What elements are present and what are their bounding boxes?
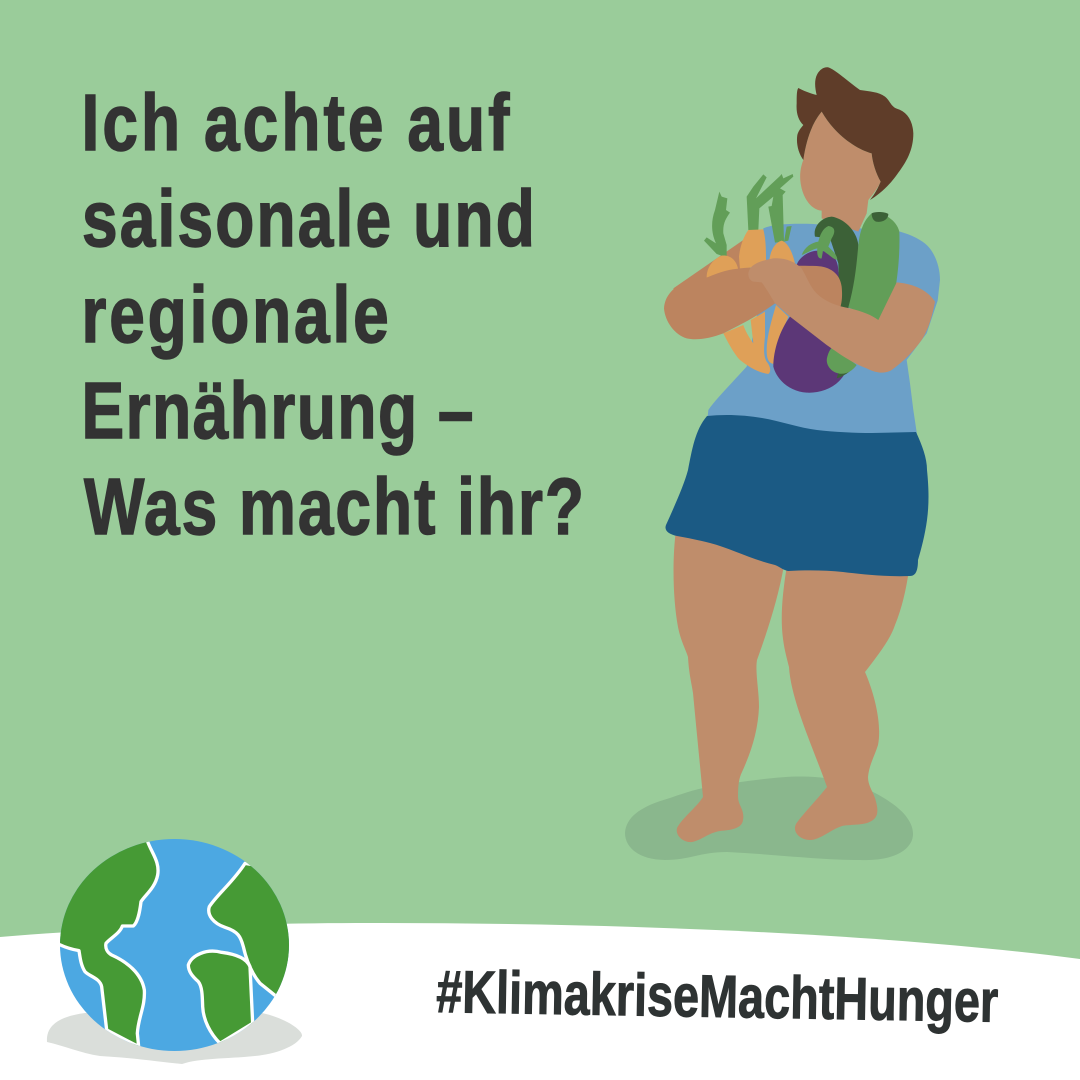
carrot tops [704,174,793,257]
upper body group [664,67,940,443]
title [82,78,584,552]
light zucchini [827,213,899,374]
ocean [60,839,289,1051]
hair [797,67,913,200]
eggplant [773,251,853,393]
shorts [665,415,928,576]
illustration: person holding vegetables [625,67,940,860]
near arm and hand [748,258,935,373]
title: Ich achte auf [82,78,510,168]
right leg [782,565,909,840]
left leg [674,530,784,842]
neck and face [800,112,881,232]
globe shadow [47,1011,302,1064]
ground shadow [625,776,913,860]
eggplant leaves [802,226,837,260]
shirt [708,224,940,443]
white wave footer band [0,923,1080,1080]
title: saisonale und [82,174,535,264]
title: Was macht ihr? [84,462,584,552]
zucchini stem [872,212,888,222]
title: regionale [82,270,389,360]
title: Ernährung – [82,366,474,456]
globe icon [47,833,302,1064]
dark zucchini [815,217,858,378]
continents [60,842,289,1046]
far upper arm behind carrots [673,240,747,313]
far forearm [664,266,842,339]
carrots [707,229,795,374]
